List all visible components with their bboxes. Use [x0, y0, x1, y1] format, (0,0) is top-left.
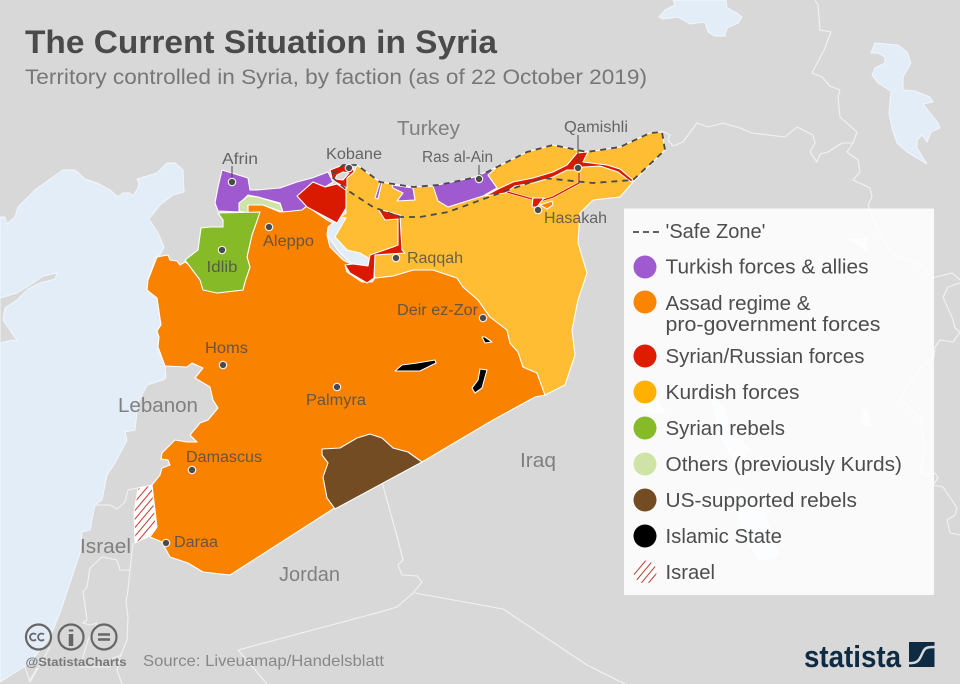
- legend: Islamic State: Islamic State: [666, 525, 782, 548]
- safe zone dashed line: [332, 132, 665, 217]
- legend: Syrian rebels: Syrian rebels: [666, 417, 785, 440]
- legend: Assad regime: Assad regime &: [666, 292, 811, 315]
- credit handle: @StatistaCharts: [26, 657, 126, 669]
- legend: Syrian/Russian forces: Syrian/Russian forces: [666, 345, 864, 368]
- territory: Kurdish forces: [335, 132, 665, 395]
- city: Kobane: Kobane: [326, 146, 382, 163]
- city: Kobane: [326, 146, 382, 172]
- territory: Turkish forces (sliver): [375, 182, 382, 199]
- city: Qamishli: Qamishli: [564, 119, 628, 136]
- city: Homs: [205, 340, 248, 369]
- legend: Others: Others (previously Kurds): [666, 453, 902, 476]
- city: Palmyra: Palmyra: [306, 392, 366, 409]
- city: Homs: Homs: [205, 340, 248, 357]
- subtitle: Territory controlled in Syria, by faction (as of 22 October 2019): [25, 66, 647, 89]
- territory: Syrian/Russian forces (Manbij): [297, 182, 346, 223]
- city: Deir ez-Zor: Deir ez-Zor: [397, 302, 478, 319]
- city: Hasakah: [534, 206, 607, 227]
- island: Cyprus: [0, 273, 57, 343]
- territory: Syrian/Russian forces (Raqqah corridor): [345, 209, 405, 283]
- legend: US-supported rebels: US-supported rebels: [666, 489, 857, 512]
- city: Damascus: [186, 449, 262, 474]
- legend: Kurdish forces: Kurdish forces: [666, 381, 800, 404]
- territory: Israel hatch: [134, 485, 156, 543]
- territory: Islamic State: [395, 337, 492, 393]
- legend: Turkish forces: Turkish forces & allies: [666, 256, 868, 278]
- territory: Turkish forces (Ras al-Ain): [433, 167, 497, 207]
- city: Aleppo: [263, 223, 314, 250]
- territory: Syrian/Russian forces (northeast roads): [485, 152, 633, 209]
- map: Syria territories: [134, 132, 665, 575]
- city: Daraa: Daraa: [174, 534, 218, 551]
- country labels: [80, 118, 556, 586]
- city: Damascus: Damascus: [186, 449, 262, 466]
- city: Ras al-Ain: Ras al-Ain: [422, 149, 493, 166]
- city: Idlib: [206, 246, 238, 276]
- legend panel: [624, 208, 934, 595]
- territory: US-supported rebels: [322, 434, 422, 509]
- icon: creative commons badges: [26, 624, 116, 650]
- legend: Assad regime: [634, 290, 880, 336]
- lakes: [640, 0, 940, 560]
- city: Aleppo: Aleppo: [263, 233, 314, 250]
- city: Raqqah: Raqqah: [407, 250, 463, 267]
- source: Source: Liveuamap/Handelsblatt: [143, 653, 385, 670]
- country labels: Turkey: [397, 118, 460, 140]
- city: Palmyra: [306, 383, 366, 409]
- country labels: Iraq: [520, 450, 556, 472]
- icon: statista mark: [909, 642, 934, 667]
- city: Afrin: [222, 151, 258, 186]
- country labels: Jordan: [279, 564, 340, 586]
- city markers and labels: [162, 119, 628, 551]
- territory: Syrian/Russian forces (Kobane): [330, 165, 354, 188]
- city: Ras al-Ain: [422, 149, 493, 183]
- statista logo: statista: [804, 639, 902, 674]
- country labels: Lebanon: [118, 395, 198, 417]
- territory: Syrian rebels (Idlib): [185, 212, 260, 293]
- territory: Turkish forces (small pocket): [392, 185, 415, 201]
- legend: Israel: Israel: [666, 561, 715, 584]
- city: Hasakah: Hasakah: [544, 210, 607, 227]
- legend: safe zone: 'Safe Zone': [666, 220, 766, 243]
- territory: Others (previously Kurds): [239, 196, 283, 213]
- sea: Mediterranean: [0, 163, 184, 682]
- territory: Turkish forces (Afrin to Kobane): [215, 170, 333, 212]
- territory: Assad regime: [147, 205, 545, 575]
- city: Qamishli: [564, 119, 628, 172]
- legend: Assad regime: pro-government forces: [666, 313, 880, 336]
- country labels: Israel: [80, 536, 131, 558]
- title: The Current Situation in Syria: [25, 24, 497, 60]
- city: Idlib: Idlib: [206, 259, 238, 276]
- city: Afrin: Afrin: [222, 151, 258, 168]
- lake: Assad reservoir: [327, 217, 372, 266]
- legend: Israel: [634, 560, 715, 584]
